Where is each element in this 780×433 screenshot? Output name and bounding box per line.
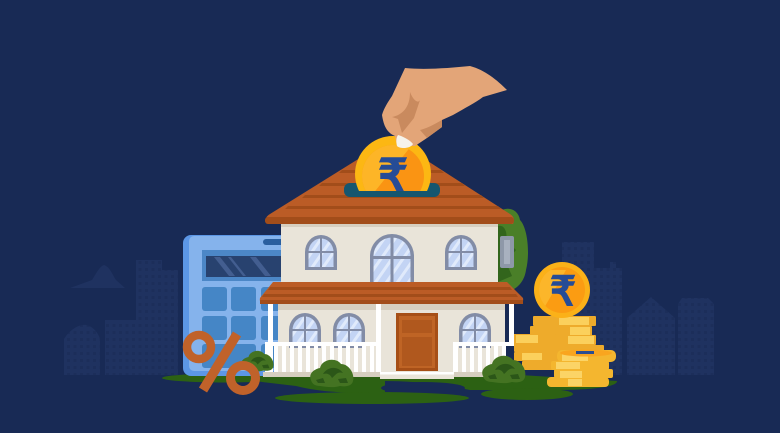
ground: pond shadow	[381, 382, 465, 394]
upper windows	[305, 235, 337, 270]
upper centre window	[370, 234, 414, 283]
porch roof	[260, 282, 523, 304]
tree behind house	[498, 209, 528, 292]
calculator keys	[202, 287, 286, 368]
upper storey wall	[281, 222, 498, 284]
stack: front coins	[547, 350, 616, 387]
silhouette: gabled building	[627, 297, 675, 375]
bush: behind left fence	[241, 351, 274, 371]
silhouette: small house	[64, 325, 100, 375]
coin slot	[344, 183, 440, 197]
silhouette: towers	[562, 242, 622, 375]
lower storey wall	[278, 304, 505, 374]
fingernail / thumb tip	[396, 135, 413, 148]
front door	[396, 313, 438, 371]
porch columns	[268, 304, 273, 372]
porch plinth	[263, 372, 381, 377]
calculator	[183, 235, 281, 376]
front steps	[380, 372, 454, 379]
stack: coin highlights	[516, 317, 594, 360]
main roof	[266, 138, 514, 224]
ground: front lawn patches	[275, 388, 573, 404]
bushes	[241, 351, 525, 387]
stack: back coins	[512, 316, 604, 370]
background city silhouette: right	[562, 242, 714, 375]
percent symbol	[187, 334, 256, 390]
calculator speaker slot	[263, 239, 281, 245]
bush: right	[482, 356, 525, 383]
background city silhouette: left	[64, 260, 178, 375]
downspout box on wall	[500, 236, 514, 268]
coin stacks: ₹	[550, 270, 576, 314]
left porch railing	[265, 342, 380, 373]
standing rupee coin	[534, 262, 590, 318]
calculator display	[202, 250, 281, 281]
house	[260, 138, 523, 379]
ground: green lawn patches	[162, 374, 617, 393]
right porch railing	[453, 342, 511, 373]
silhouette: wide building	[105, 260, 178, 375]
illustration: hand dropping a rupee coin into a house	[64, 66, 714, 404]
coin stacks	[512, 262, 616, 387]
bush: centre	[310, 360, 353, 387]
calculator body	[183, 235, 281, 376]
rupee coin entering slot	[355, 136, 431, 191]
silhouette: cloud roof	[70, 265, 125, 288]
lower windows	[289, 313, 321, 348]
silhouette: tall building	[678, 298, 714, 375]
rupee coin entering slot: ₹	[378, 150, 408, 202]
hand holding coin	[382, 66, 507, 148]
